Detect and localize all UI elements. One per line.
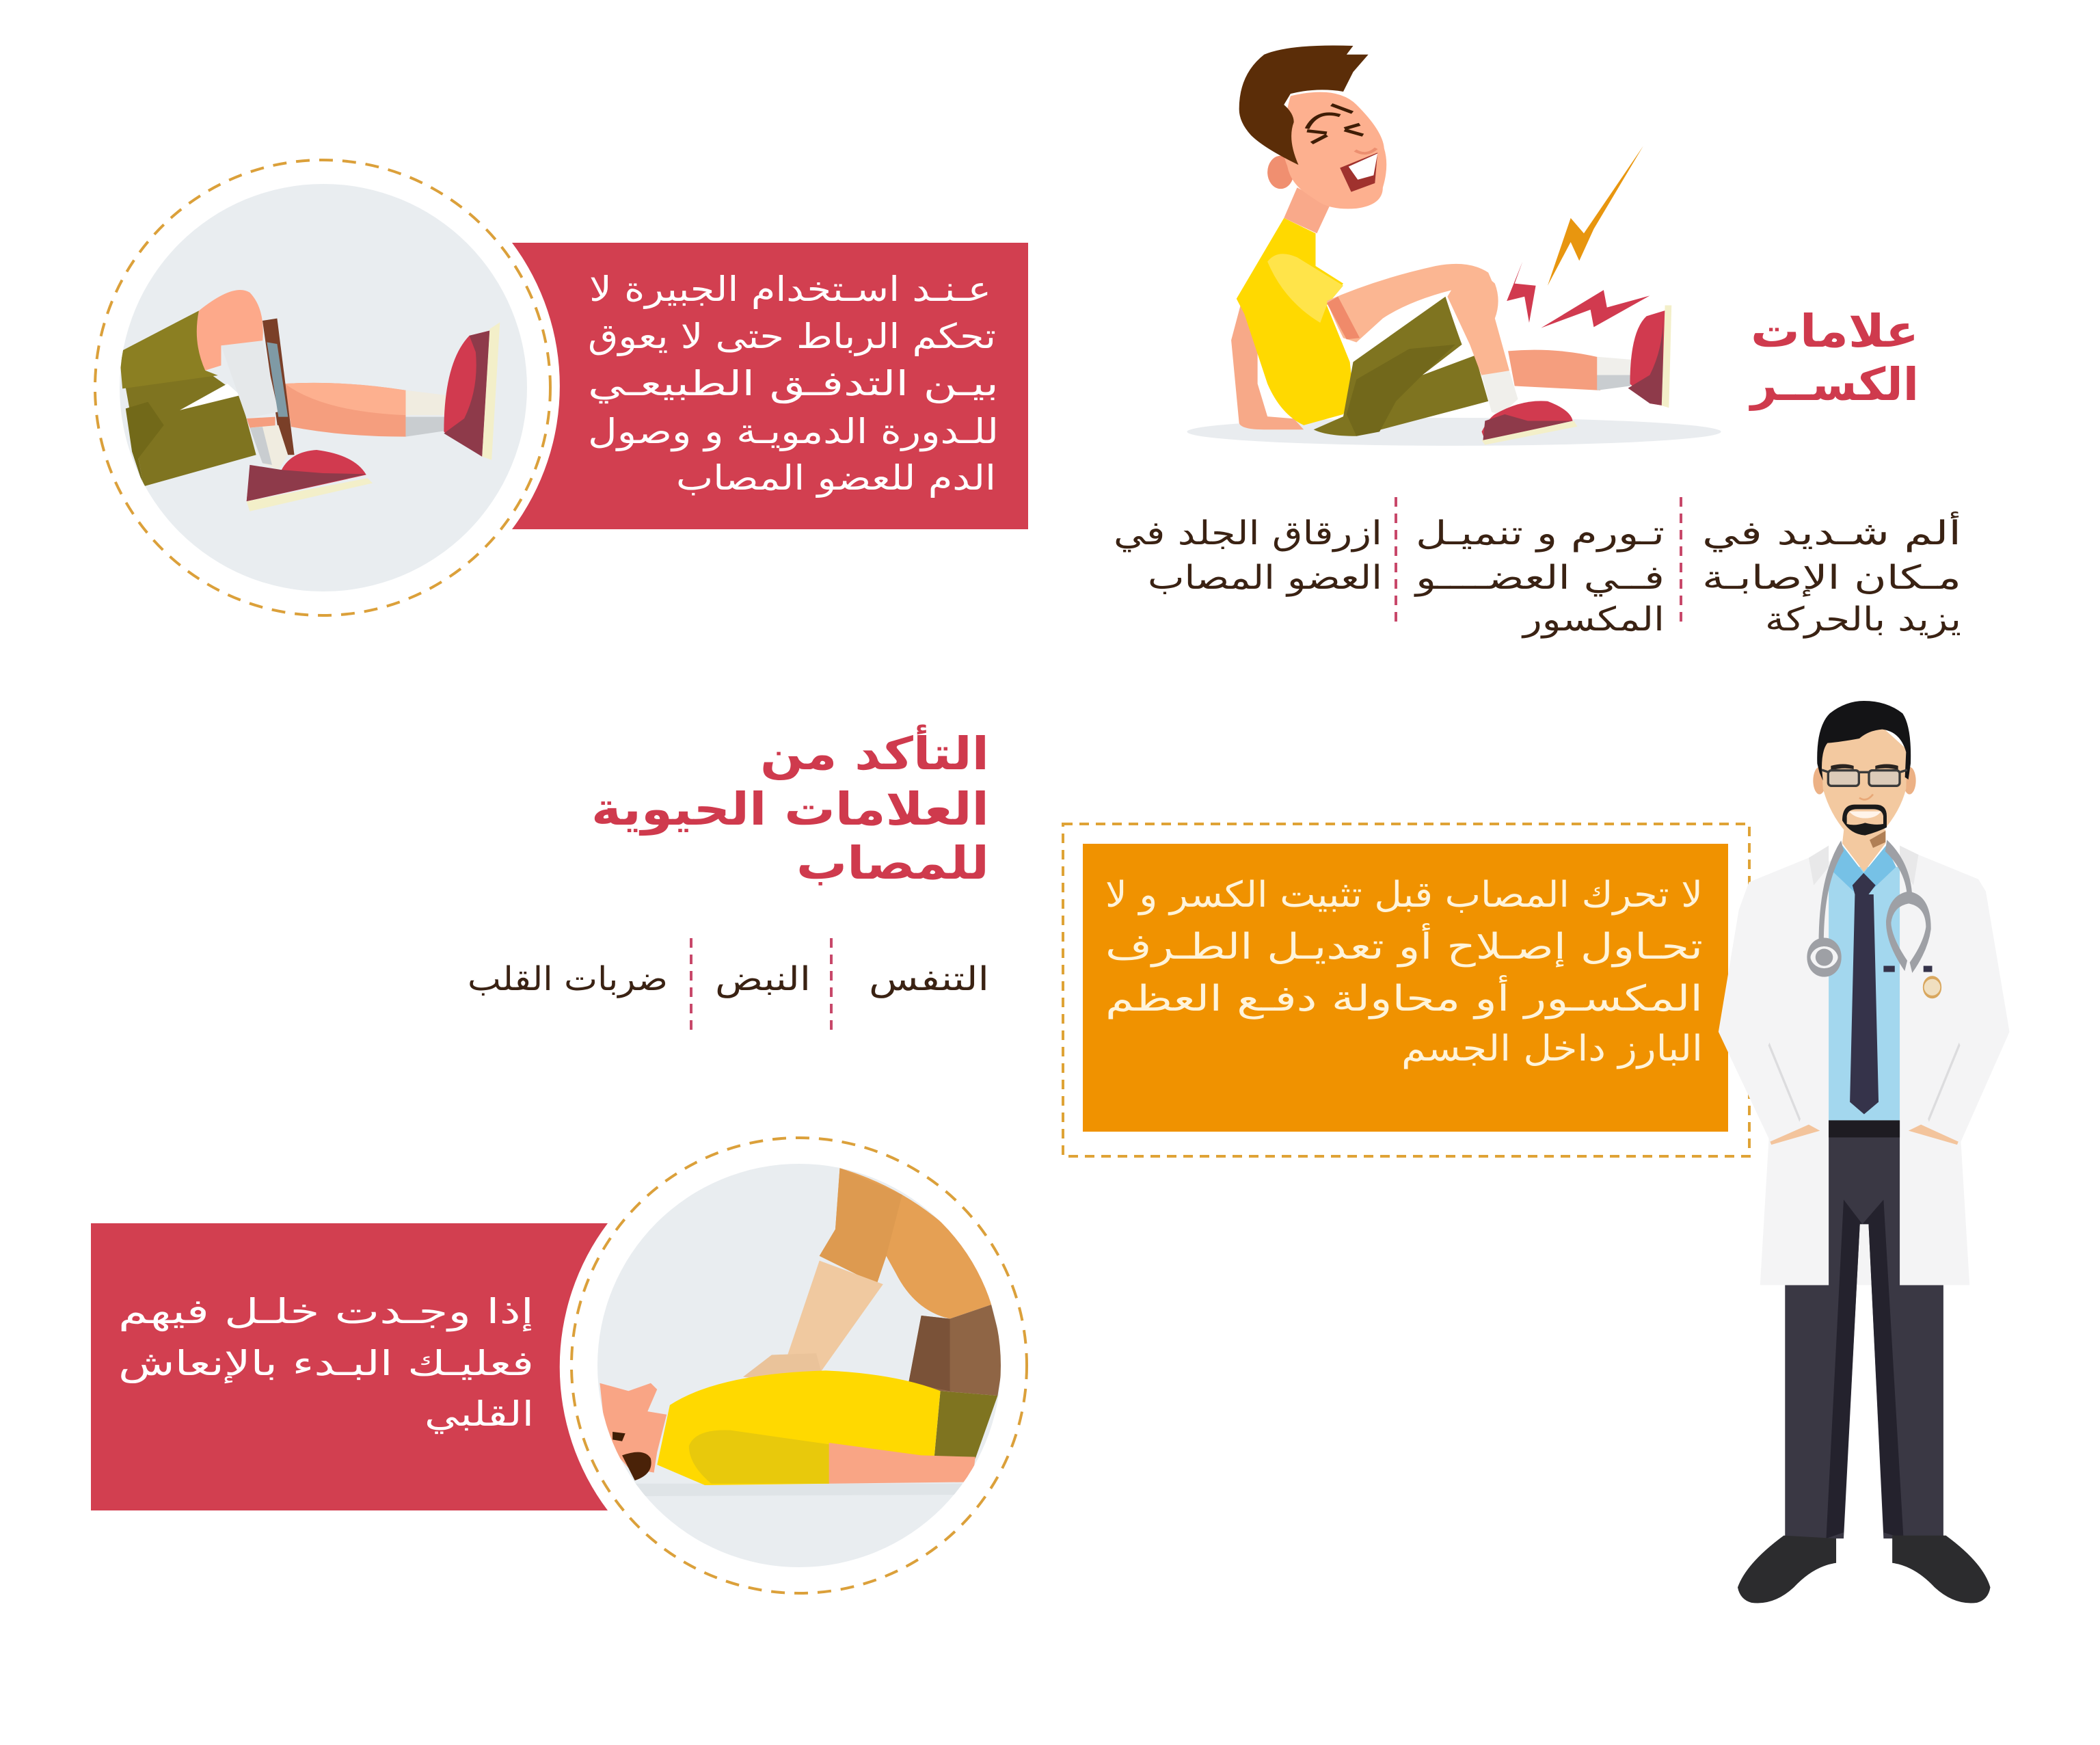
- panel: splint callout: عـنـد اسـتخدام الجبيرة لا: [589, 269, 991, 309]
- heading: signs of fracture: [1749, 305, 1919, 411]
- panel: orange warning box: البارز داخل الجسم: [1401, 1028, 1703, 1069]
- panel: CPR callout: فعليـك البـدء بالإنعاش: [118, 1344, 534, 1383]
- panel: splint callout: الدم للعضو المصاب: [676, 458, 996, 498]
- icon: doctor: [1719, 701, 2010, 1603]
- label: pulse: النبض: [715, 960, 811, 998]
- panel: CPR callout: إذا وجـدت خلـل فيهم: [118, 1292, 534, 1332]
- text block: swelling and numbness: [1414, 514, 1665, 639]
- panel: orange warning box: [1063, 824, 1749, 1156]
- heading: check vital signs: [591, 724, 989, 890]
- icon: splinted leg circle: [95, 160, 550, 615]
- panel: splint callout: تحكم الرباط حتى لا يعوق: [588, 317, 996, 356]
- label: breathing: التنفس: [869, 960, 989, 998]
- text block: swelling and numbness: فــي العضــــو: [1414, 559, 1665, 597]
- icon: CPR circle: [571, 1138, 1027, 1593]
- panel: splint callout: [512, 243, 1028, 529]
- panel: CPR callout: [91, 1223, 608, 1510]
- text block: swelling and numbness: تـورم و تنميـل: [1416, 514, 1665, 552]
- heading: check vital signs: العلامات الحيوية: [591, 783, 989, 836]
- text block: swelling and numbness: المكسور: [1522, 600, 1665, 639]
- icon: red lightning bolt right: [1541, 290, 1650, 328]
- icon: orange lightning bolt: [1548, 146, 1643, 286]
- text block: severe pain: مـكان الإصابـة: [1702, 559, 1961, 597]
- panel: splint callout: للـدورة الدمويـة و وصول: [588, 412, 999, 452]
- text block: severe pain: يزيد بالحركة: [1765, 600, 1961, 639]
- text block: severe pain: ألم شـديد في: [1702, 511, 1961, 552]
- panel: fracture signs illustration: [1187, 45, 1721, 446]
- heading: check vital signs: التأكد من: [760, 724, 989, 780]
- panel: CPR callout: القلبي: [425, 1394, 534, 1434]
- panel: orange warning box: لا تحرك المصاب قبل تثبيت الكسر و لا: [1105, 875, 1703, 916]
- heading: signs of fracture: علامات: [1751, 305, 1919, 358]
- text block: skin bluish: ازرقاق الجلد في: [1114, 514, 1382, 552]
- label: heartbeat: ضربات القلب: [468, 960, 668, 998]
- panel: splint callout: بيـن التدفـق الطبيعـي: [588, 364, 999, 403]
- heading: signs of fracture: الكســر: [1749, 358, 1919, 411]
- text block: severe pain: [1702, 511, 1961, 639]
- text block: skin bluish: العضو المصاب: [1148, 559, 1382, 597]
- text block: skin bluish: [1114, 514, 1382, 597]
- panel: orange warning box: المكسـور أو محاولة دفـع العظم: [1105, 975, 1703, 1020]
- panel: orange warning box: تحـاول إصـلاح أو تعديـل الطـرف: [1105, 923, 1703, 968]
- icon: red lightning bolt left: [1507, 262, 1536, 323]
- heading: check vital signs: للمصاب: [796, 837, 989, 890]
